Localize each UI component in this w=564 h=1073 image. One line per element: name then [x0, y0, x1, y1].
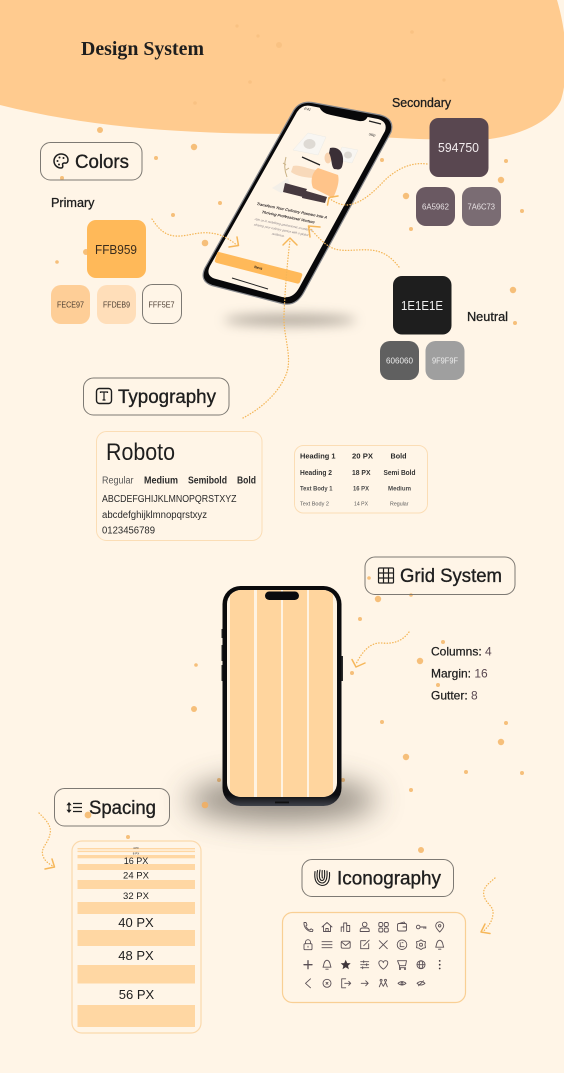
primary swatches: FFB959: [95, 243, 137, 257]
secondary swatches: 7A6C73: [468, 202, 495, 212]
icon: menu: [322, 942, 332, 948]
character set: [102, 494, 236, 536]
illustration card hearts: [304, 139, 352, 158]
icon: four squares: [379, 922, 388, 932]
onboarding headline: Transform Your Culinary Passion Into A: [256, 201, 329, 220]
icon: key: [416, 925, 426, 929]
font weights: Medium: [144, 476, 178, 486]
row: text body 1: 16 PX: [353, 486, 369, 492]
spacing bars: [78, 848, 195, 1027]
onboarding body: Join us in redefining gastronomic excellence,: [254, 217, 315, 232]
spacing labels: 40 PX: [118, 915, 154, 930]
font weights: Bold: [237, 476, 256, 486]
columns value: Columns: 4: [431, 644, 492, 658]
margin value: Margin: 16: [431, 666, 488, 680]
button label: Next: [254, 265, 263, 271]
character set: 0123456789: [102, 526, 155, 536]
icon: eye: [398, 982, 406, 985]
row: heading 1: Bold: [390, 452, 407, 460]
neutral swatches: [380, 276, 464, 380]
grid specs: [431, 644, 492, 702]
illustration: angled phone mockup: [203, 102, 392, 304]
neutral swatches: 1E1E1E: [401, 299, 443, 313]
row: text body 1: Text Body 1: [300, 486, 333, 492]
secondary swatches: 594750: [438, 141, 479, 155]
row: heading 1: [300, 452, 407, 460]
spacing labels: 56 PX: [119, 987, 155, 1002]
icon: fingerprint: [315, 870, 330, 886]
bottom port: [275, 802, 289, 803]
panel: grid system heading: [365, 557, 515, 594]
icon: mail: [341, 941, 350, 948]
arrow: grid specs to phone: [352, 632, 409, 667]
title: Design System: [81, 38, 204, 60]
font weights: Regular: [102, 476, 134, 486]
panel: type scale table: [294, 446, 428, 513]
label: neutral: Neutral: [467, 310, 508, 324]
row: text body 2: Text Body 2: [300, 502, 329, 508]
primary swatches: FFF5E7: [148, 300, 175, 310]
icon: document circle: [397, 940, 407, 950]
panel: spacing heading: [54, 788, 170, 826]
icon: line spacing: [67, 802, 82, 812]
neutral swatches: 9F9F9F: [432, 356, 458, 366]
gutter value: Gutter: 8: [431, 688, 478, 702]
row: text body 2: 14 PX: [354, 502, 368, 508]
panel: colors heading: Colors: [75, 152, 129, 173]
font weights: [102, 476, 256, 486]
icon: sliders: [361, 961, 369, 969]
row: heading 1: 20 PX: [352, 452, 373, 460]
icon: settings flower: [416, 940, 426, 950]
icon: wallet: [398, 922, 406, 931]
icon: map pin: [436, 922, 444, 932]
spacing labels: 24 PX: [123, 870, 150, 882]
scattered dots: [55, 24, 524, 853]
row: text body 2: [300, 502, 409, 508]
status icons: [369, 121, 381, 124]
onboarding button: [215, 252, 302, 284]
character set: ABCDEFGHIJKLMNOPQRSTXYZ: [102, 494, 236, 505]
label: primary: Primary: [51, 196, 95, 210]
row: text body 2: Regular: [390, 502, 409, 508]
primary swatches: FFDEB9: [103, 300, 130, 310]
panel: icon set: [282, 912, 466, 1002]
icon: lock: [304, 940, 312, 950]
primary swatches: FECE97: [57, 300, 84, 310]
row: heading 2: Semi Bold: [384, 470, 416, 477]
icon: circle close: [323, 979, 331, 987]
icon: more: [439, 960, 441, 969]
dot over shadow: [202, 802, 208, 808]
icon: eye off: [417, 981, 425, 986]
header blob: [0, 0, 564, 140]
icon: text box: [96, 388, 112, 404]
status and skip text: 9:41: [303, 107, 312, 112]
icon: globe: [417, 961, 425, 969]
icon: palette: [54, 154, 68, 168]
icon: notification bell: [436, 940, 444, 949]
panel: typography heading: Typography: [118, 387, 216, 408]
spacing labels: [118, 847, 155, 1002]
illustration cards: [293, 133, 358, 163]
icon: arrow right: [361, 981, 368, 986]
secondary swatches: 6A5962: [422, 202, 449, 212]
panel: grid system heading: Grid System: [400, 566, 502, 587]
shadow under grid phone: [187, 778, 377, 822]
icon: user: [360, 922, 369, 932]
status and skip text: [297, 107, 383, 137]
icon: bell: [323, 960, 331, 969]
illustration: woman cooking: [272, 148, 343, 203]
spacing labels: 4 PX: [133, 847, 139, 850]
row: heading 2: Heading 2: [300, 470, 332, 477]
arrow: iconography to card: [481, 878, 495, 934]
icon: phone: [304, 922, 313, 932]
icon: home: [322, 922, 332, 932]
grid columns: [230, 590, 333, 797]
onboarding body: [248, 217, 315, 243]
panel: spacing heading: Spacing: [89, 798, 156, 819]
arrow: secondary to phone: [328, 164, 427, 205]
arrow: typography to phone: [243, 238, 297, 418]
primary swatches: [51, 220, 182, 324]
spacing labels: 8 PX: [133, 852, 139, 856]
row: text body 1: [300, 486, 411, 492]
spacing labels: 48 PX: [118, 948, 154, 963]
screen content: [237, 107, 383, 244]
icon: edit: [361, 940, 369, 949]
arrow: primary to phone: [152, 219, 238, 247]
onboarding body: sharing your culinary genius with a global: [253, 223, 310, 237]
status and skip text: Skip: [368, 132, 376, 137]
icon: grid: [378, 568, 394, 583]
spacing labels: 32 PX: [123, 891, 150, 902]
icon: log out: [342, 979, 351, 988]
panel: spacing scale: [72, 841, 201, 1033]
icon: cart: [398, 961, 406, 970]
icon: close: [379, 941, 387, 949]
home indicator: [232, 278, 268, 289]
dynamic island: [265, 592, 299, 600]
character set: abcdefghijklmnopqrstxyz: [102, 510, 207, 521]
icon: bar chart: [341, 923, 350, 932]
panel: roboto font card: Roboto: [106, 439, 175, 466]
font weights: Semibold: [188, 476, 227, 486]
label: secondary: Secondary: [392, 96, 452, 110]
phone side buttons: [222, 629, 343, 681]
arrow: spacing to card: [39, 813, 54, 869]
neutral swatches: 606060: [386, 356, 413, 366]
icon: plus: [304, 961, 312, 969]
arrow: neutral to phone: [308, 226, 399, 267]
phone screen: [227, 590, 337, 797]
spacing labels: 16 PX: [124, 856, 148, 866]
onboarding headline: Thriving Professional Venture: [261, 209, 317, 225]
panel: colors heading: [40, 142, 142, 180]
icon: heart: [379, 961, 388, 969]
illustration: grid phone mockup: [222, 586, 343, 806]
secondary swatches: [416, 118, 501, 226]
panel: roboto font card: [96, 432, 262, 540]
row: heading 2: [300, 470, 416, 477]
row: text body 1: Medium: [388, 486, 411, 492]
phone notch: [319, 106, 368, 121]
panel: iconography heading: Iconography: [337, 868, 441, 890]
panel: typography heading: [84, 378, 229, 415]
shadow under top phone: [224, 315, 356, 325]
icon: star: [341, 960, 351, 969]
onboarding body: audience.: [271, 232, 286, 238]
icon: people: [379, 979, 387, 987]
row: heading 2: 18 PX: [352, 470, 371, 477]
row: heading 1: Heading 1: [300, 452, 336, 460]
icon: chevron left: [306, 979, 310, 988]
panel: iconography heading: [302, 860, 454, 896]
